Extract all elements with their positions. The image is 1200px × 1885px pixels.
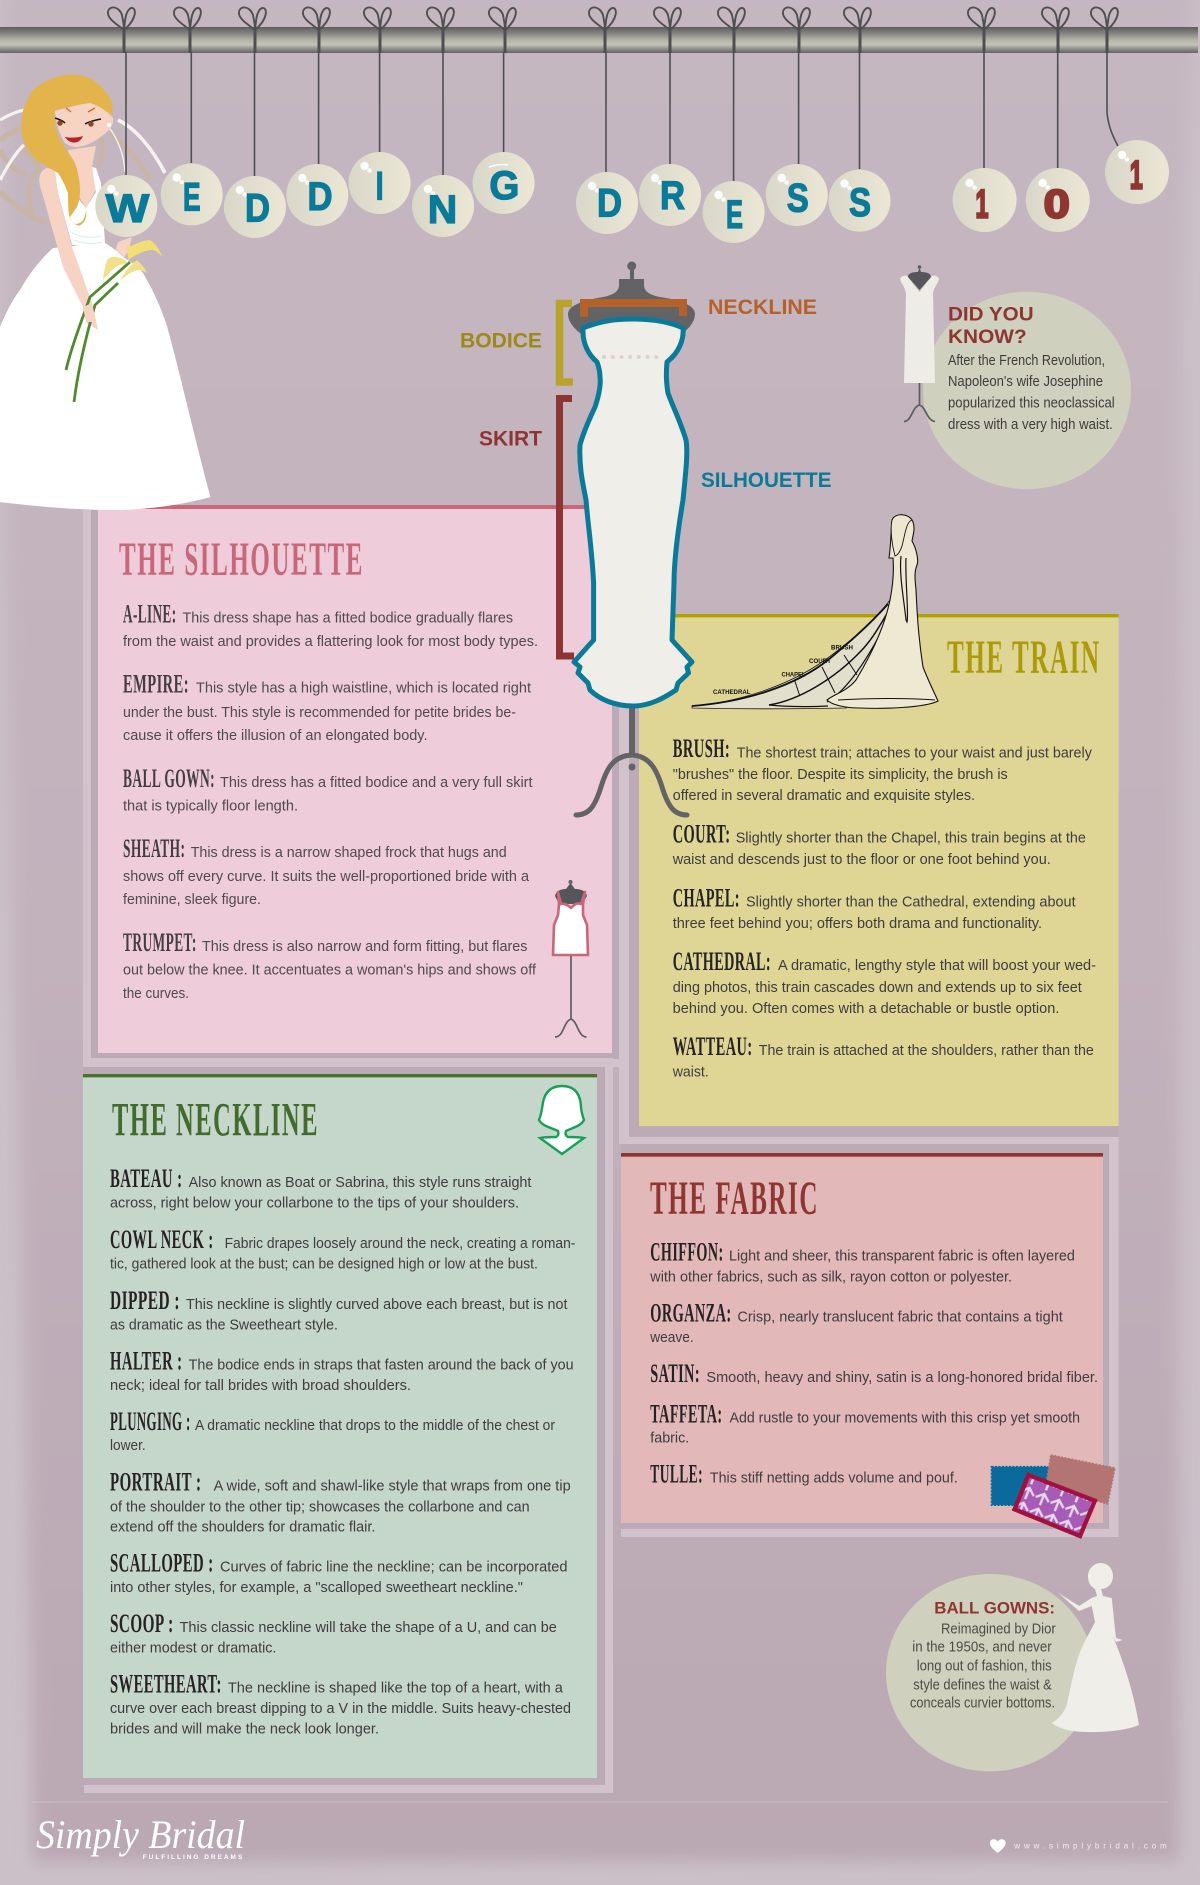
entry: satin <box>650 1359 1098 1388</box>
entry: cathedral: ding photos, this train cascades down and extends up to six feet <box>673 980 1082 996</box>
entry: court <box>672 820 1086 868</box>
entry: scoop: either modest or dramatic. <box>110 1641 276 1657</box>
letter G <box>473 7 535 214</box>
label: silhouette: SILHOUETTE <box>701 468 832 492</box>
bouquet stems <box>66 262 130 402</box>
letter S: S <box>787 176 809 220</box>
text: did you know body <box>948 353 1115 433</box>
digit 0 <box>1026 7 1090 232</box>
entry: portrait: extend off the shoulders for dramatic flair. <box>110 1519 375 1535</box>
letter R <box>639 7 701 226</box>
entry: bateau <box>110 1164 531 1212</box>
entry: watteau: The train is attached at the shoulders, rather than the <box>759 1043 1094 1059</box>
entry: plunging <box>110 1407 555 1454</box>
letter W <box>95 7 157 237</box>
hand <box>83 303 98 330</box>
entry: cathedral: CATHEDRAL: <box>673 947 771 976</box>
panel: the silhouette <box>83 505 626 1067</box>
text: website: www.simplybridal.com <box>1013 1841 1167 1850</box>
waist dotted line <box>604 355 664 359</box>
entry: tulle: TULLE: <box>650 1460 703 1489</box>
calla lilies <box>103 240 162 280</box>
entry: taffeta: TAFFETA: <box>650 1399 723 1428</box>
face <box>55 103 113 147</box>
entry: halter: The bodice ends in straps that fasten around the back of you <box>189 1357 574 1373</box>
entry: chiffon: CHIFFON: <box>650 1238 724 1267</box>
letter S <box>828 7 890 232</box>
letter N: N <box>428 188 457 232</box>
entry: plunging: PLUNGING : <box>110 1407 191 1436</box>
digit 1: 1 <box>976 182 988 226</box>
entry: ball gown: This dress has a fitted bodice and a very full skirt <box>220 775 532 791</box>
illustration: bride <box>0 74 210 510</box>
hair and strand <box>22 74 113 226</box>
entry: halter <box>110 1346 574 1394</box>
letter W: W <box>106 187 149 231</box>
entry: plunging: lower. <box>110 1438 146 1454</box>
logo: simply bridal: FULFILLING DREAMS <box>143 1854 243 1861</box>
entry: scoop: This classic neckline will take the shape of a U, and can be <box>180 1620 557 1636</box>
entry: watteau <box>672 1032 1094 1081</box>
label: neckline: NECKLINE <box>708 295 817 319</box>
letter E <box>161 7 223 226</box>
text: ball gowns body <box>910 1621 1056 1712</box>
veil <box>0 110 165 223</box>
entry: chiffon: with other fabrics, such as silk, rayon cotton or polyester. <box>649 1269 1012 1285</box>
entry: chapel <box>673 884 1076 932</box>
letter I <box>349 7 411 214</box>
icon: empire dress mannequin <box>900 265 939 422</box>
entry: brush: offered in several dramatic and exquisite styles. <box>673 788 975 804</box>
letter S <box>766 7 828 226</box>
entry: trumpet: the curves. <box>123 986 189 1002</box>
letter D: D <box>245 187 270 231</box>
letter R: R <box>660 174 685 218</box>
entry: brush: "brushes" the floor. Despite its simplicity, the brush is <box>673 767 1008 783</box>
text: did you know body: popularized this neoclassical <box>948 395 1115 411</box>
entry: dipped <box>110 1286 568 1333</box>
digit 0: 0 <box>1044 182 1070 226</box>
entry: cathedral: behind you. Often comes with a detachable or bustle option. <box>673 1001 1059 1017</box>
entry: cowl neck: COWL NECK : <box>110 1225 214 1254</box>
digit 1 <box>953 7 1017 232</box>
entry: ball gown <box>123 764 532 814</box>
entry: satin: SATIN: <box>650 1359 700 1388</box>
letter E: E <box>183 175 201 219</box>
letter S: S <box>849 181 871 225</box>
entry: court: COURT: <box>673 820 730 849</box>
entry: tulle <box>650 1460 958 1489</box>
entry: a-line: A-LINE: <box>123 600 176 629</box>
letter D: D <box>597 182 622 226</box>
icon: fabric swatches <box>992 1455 1115 1536</box>
text: ball gowns body: long out of fashion, this <box>917 1659 1052 1675</box>
icon: ball gown figure <box>1052 1563 1139 1732</box>
entry: taffeta <box>650 1399 1080 1447</box>
text: ball gowns heading: BALL GOWNS: <box>934 1599 1055 1617</box>
label: bodice: BODICE <box>460 328 542 352</box>
mannequin bust top <box>568 262 695 335</box>
dress silhouette <box>574 319 692 706</box>
text: ball gowns body: conceals curvier bottoms. <box>910 1696 1055 1712</box>
entry: taffeta: fabric. <box>650 1431 689 1447</box>
train labels: BRUSH <box>831 645 853 652</box>
entry: a-line <box>123 600 538 650</box>
heading: did you know: DID YOU <box>948 304 1034 326</box>
bodice <box>53 167 105 246</box>
entry: satin: Smooth, heavy and shiny, satin is a long-honored bridal fiber. <box>706 1370 1098 1386</box>
panel: the fabric <box>621 1137 1119 1537</box>
logo: simply bridal: Simply Bridal <box>36 1812 245 1857</box>
neck and chest <box>68 146 96 208</box>
entry: brush: BRUSH: <box>673 734 730 763</box>
callout: did you know <box>900 265 1131 489</box>
letter E <box>703 7 765 243</box>
heading: the fabric: THE FABRIC <box>650 1172 819 1225</box>
entry: trumpet: out below the knee. It accentuates a woman's hips and shows off <box>123 963 537 979</box>
icon: heart <box>990 1839 1006 1853</box>
entry: sweetheart: The neckline is shaped like the top of a heart, with a <box>228 1680 564 1696</box>
entry: portrait: A wide, soft and shawl-like style that wraps from one tip <box>214 1479 571 1495</box>
digit 1: 1 <box>1130 154 1143 198</box>
train labels: CATHEDRAL <box>713 689 751 696</box>
mannequin stand <box>576 704 687 815</box>
entry: halter: HALTER : <box>110 1346 182 1375</box>
text: did you know body: dress with a very high waist. <box>948 417 1113 433</box>
footer <box>32 1802 1168 1861</box>
entry: taffeta: Add rustle to your movements with this crisp yet smooth <box>730 1410 1080 1426</box>
entry: scalloped: into other styles, for example, a "scalloped sweetheart neckline." <box>110 1580 523 1596</box>
entry: cowl neck: tic, gathered look at the bust; can be designed high or low at the bust. <box>110 1256 538 1272</box>
entry: sweetheart: SWEETHEART: <box>110 1669 222 1698</box>
digit 1 <box>1091 7 1169 204</box>
entry: cowl neck: Fabric drapes loosely around the neck, creating a roman- <box>225 1236 576 1252</box>
text: ball gowns body: in the 1950s, and never <box>912 1640 1052 1656</box>
entry: portrait <box>110 1468 571 1535</box>
entry: watteau: waist. <box>672 1065 709 1081</box>
entry: ball gown: that is typically floor length. <box>123 798 298 814</box>
entry: organza <box>649 1298 1063 1346</box>
heading: the silhouette: THE SILHOUETTE <box>119 533 364 586</box>
letter I: I <box>376 165 384 209</box>
label: skirt: SKIRT <box>479 427 542 451</box>
entry: sheath: SHEATH: <box>123 834 185 863</box>
entry: sweetheart: brides and will make the neck look longer. <box>110 1721 379 1737</box>
heading: the neckline: THE NECKLINE <box>112 1094 319 1147</box>
far arm <box>115 237 132 260</box>
entry: chapel: three feet behind you; offers both drama and functionality. <box>673 916 1042 932</box>
letter D <box>224 7 286 238</box>
entry: chapel: CHAPEL: <box>673 884 740 913</box>
train labels: CHAPEL <box>782 672 806 679</box>
entry: empire: This style has a high waistline, which is located right <box>196 681 531 697</box>
train labels <box>713 645 853 696</box>
entry: ball gown: BALL GOWN: <box>123 764 215 793</box>
entry: portrait: PORTRAIT : <box>110 1468 201 1497</box>
entry: trumpet <box>123 928 537 1002</box>
bodice bracket <box>560 304 573 382</box>
entry: empire: EMPIRE: <box>123 670 189 699</box>
text: ball gowns body: Reimagined by Dior <box>941 1621 1056 1637</box>
entry: cathedral: A dramatic, lengthy style that will boost your wed- <box>778 958 1096 974</box>
entry: dipped: This neckline is slightly curved above each breast, but is not <box>186 1297 568 1313</box>
letter D <box>286 7 348 226</box>
entry: sheath: feminine, sleek figure. <box>123 892 261 908</box>
entry: empire: cause it offers the illusion of an elongated body. <box>123 728 428 744</box>
entry: court: Slightly shorter than the Chapel, this train begins at the <box>736 831 1086 847</box>
icon: neckline silhouette <box>539 1086 584 1154</box>
text: ball gowns body: style defines the waist & <box>913 1677 1052 1693</box>
entry: halter: neck; ideal for tall brides with broad shoulders. <box>110 1378 411 1394</box>
entry: cathedral <box>673 947 1096 1017</box>
entry: empire: under the bust. This style is recommended for petite brides be- <box>123 705 516 721</box>
tick lines <box>794 655 857 695</box>
illustration: bride with train lengths <box>692 515 938 709</box>
entry: bateau: BATEAU : <box>110 1164 182 1193</box>
heading: did you know: KNOW? <box>948 326 1027 348</box>
entry: bateau: across, right below your collarbone to the tips of your shoulders. <box>110 1196 519 1212</box>
entry: scoop: SCOOP : <box>110 1609 174 1638</box>
entry: brush <box>673 734 1093 804</box>
entry: sweetheart: curve over each breast dipping to a V in the middle. Suits heavy-chested <box>110 1701 571 1717</box>
callout: ball gowns <box>886 1563 1139 1771</box>
entry: a-line: This dress shape has a fitted bodice gradually flares <box>182 611 513 627</box>
entry: chiffon <box>649 1238 1075 1285</box>
panel: the neckline <box>83 1058 613 1793</box>
neckline bracket <box>584 303 683 317</box>
letter D <box>576 7 638 234</box>
entry: brush: The shortest train; attaches to your waist and just barely <box>737 746 1093 762</box>
letter N <box>412 7 474 237</box>
entry: chapel: Slightly shorter than the Cathedral, extending about <box>746 895 1076 911</box>
skirt bracket <box>560 398 574 656</box>
entry: organza: ORGANZA: <box>650 1298 732 1327</box>
letter G: G <box>489 164 519 208</box>
entry: cowl neck <box>110 1225 576 1272</box>
text: did you know body: Napoleon's wife Josephine <box>948 374 1103 390</box>
skirt <box>0 243 210 510</box>
entry: dipped: as dramatic as the Sweetheart style. <box>110 1317 338 1333</box>
entry: organza: Crisp, nearly translucent fabric that contains a tight <box>737 1309 1063 1325</box>
arm <box>39 168 98 330</box>
curtain rod <box>0 27 1198 53</box>
letter D: D <box>308 175 332 219</box>
entry: tulle: This stiff netting adds volume and pouf. <box>710 1471 958 1487</box>
title: wedding dress 101 hanging bubbles <box>95 7 1169 243</box>
entry: plunging: A dramatic neckline that drops to the middle of the chest or <box>195 1418 555 1434</box>
entry: scoop <box>110 1609 557 1657</box>
entry: scalloped <box>110 1548 568 1596</box>
entry: sheath: shows off every curve. It suits the well-proportioned bride with a <box>123 869 530 885</box>
entry: portrait: of the shoulder to the other tip; showcases the collarbone and can <box>110 1499 530 1515</box>
train labels: COURT <box>809 658 831 665</box>
entry: watteau: WATTEAU: <box>673 1032 753 1061</box>
entry: scalloped: Curves of fabric line the neckline; can be incorporated <box>220 1559 568 1575</box>
entry: sheath <box>123 834 530 908</box>
entry: trumpet: TRUMPET: <box>123 928 197 957</box>
icon: small pink dress mannequin <box>553 880 588 1037</box>
entry: a-line: from the waist and provides a flattering look for most body types. <box>123 634 538 650</box>
entry: organza: weave. <box>649 1330 694 1346</box>
letter E: E <box>726 193 743 237</box>
entry: chiffon: Light and sheer, this transparent fabric is often layered <box>729 1249 1075 1265</box>
entry: scalloped: SCALLOPED : <box>110 1548 214 1577</box>
panel: the train <box>612 515 1119 1144</box>
entry: empire <box>123 670 531 744</box>
entry: sweetheart <box>110 1669 571 1737</box>
entry: bateau: Also known as Boat or Sabrina, this style runs straight <box>189 1175 531 1191</box>
entry: dipped: DIPPED : <box>110 1286 180 1315</box>
entry: court: waist and descends just to the floor or one foot behind you. <box>672 852 1051 868</box>
entry: sheath: This dress is a narrow shaped frock that hugs and <box>191 845 507 861</box>
text: did you know body: After the French Revolution, <box>948 353 1105 369</box>
entry: trumpet: This dress is also narrow and form fitting, but flares <box>202 939 528 955</box>
diagram: dress anatomy mannequin <box>460 262 832 815</box>
heading: did you know <box>948 304 1034 348</box>
